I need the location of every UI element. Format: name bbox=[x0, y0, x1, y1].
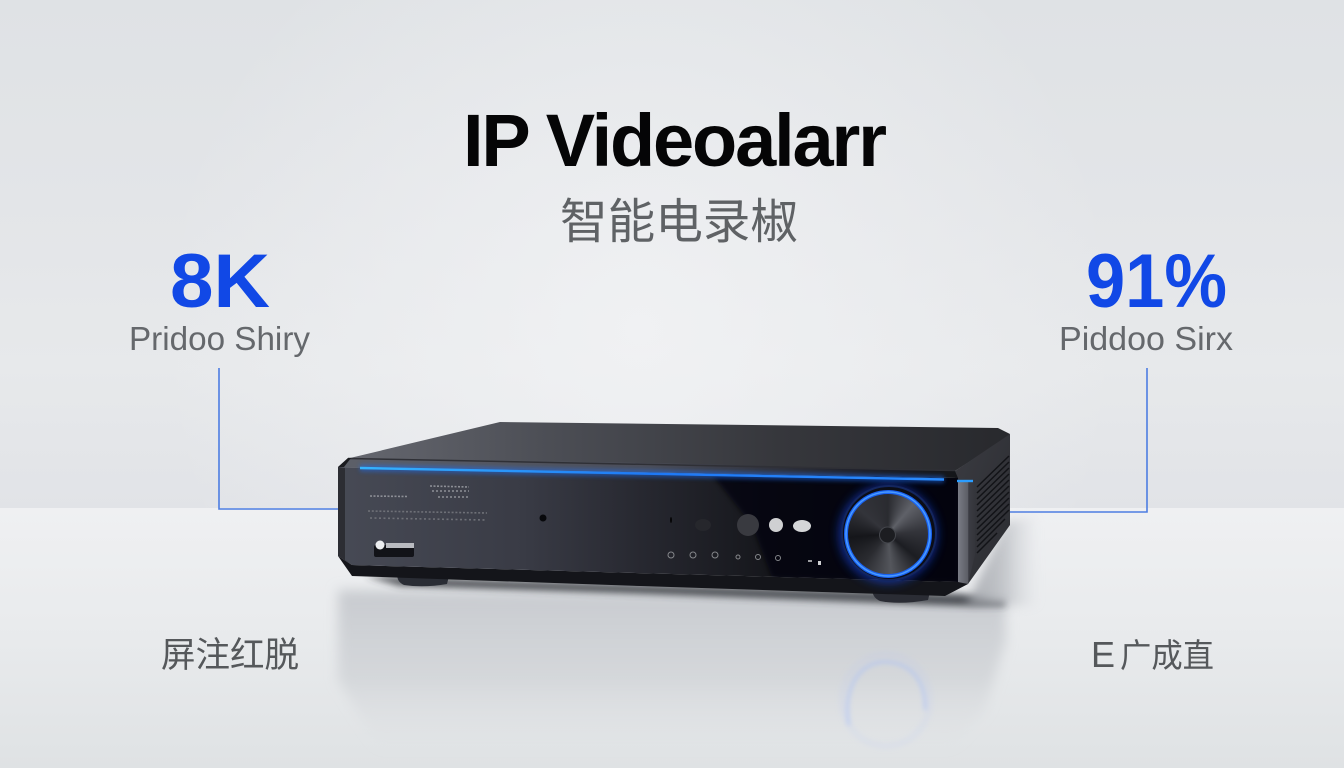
right connector line bbox=[1008, 368, 1147, 512]
floor reflection of device bbox=[338, 590, 1006, 750]
left connector line bbox=[219, 368, 340, 509]
right side panel bbox=[955, 434, 1010, 584]
glossy dark area on front bbox=[710, 472, 958, 582]
left stat bbox=[129, 239, 310, 357]
front panel logo badge bbox=[374, 540, 414, 557]
glossy floor bbox=[0, 508, 1344, 768]
blue light bar bbox=[360, 468, 973, 481]
top bevel bbox=[338, 458, 958, 478]
background wall bbox=[0, 0, 1344, 510]
left caption: 屏注红脱 bbox=[161, 636, 299, 675]
reflected knob glow bbox=[842, 654, 930, 746]
front panel buttons bbox=[670, 514, 811, 536]
small indicator icons bbox=[668, 552, 821, 565]
control knob bbox=[839, 485, 937, 583]
stat label: right: Piddoo Sirx bbox=[1059, 320, 1234, 357]
subtitle: 智能电录椒 bbox=[560, 196, 798, 249]
silver corner strip bbox=[957, 480, 975, 584]
indicator dot bbox=[540, 514, 546, 522]
contact shadow under device bbox=[365, 516, 1040, 606]
bottom lip bbox=[338, 556, 968, 596]
title: IP Videoalarr bbox=[463, 99, 887, 182]
left corner facet bbox=[338, 467, 352, 565]
front panel bbox=[338, 467, 958, 582]
right caption bbox=[1091, 634, 1214, 675]
front panel fine print bbox=[368, 486, 487, 520]
right stat bbox=[1059, 239, 1234, 357]
stat label: left: Pridoo Shiry bbox=[129, 320, 310, 357]
right caption: 广成直 bbox=[1120, 637, 1214, 674]
right caption: E bbox=[1091, 634, 1115, 675]
stat value: 8K: 8K bbox=[170, 239, 270, 324]
feet bbox=[397, 574, 930, 603]
stat value: 91%: 91% bbox=[1086, 239, 1227, 324]
video recorder device bbox=[338, 422, 1010, 603]
top panel bbox=[350, 422, 1010, 471]
ventilation slots bbox=[977, 456, 1009, 553]
